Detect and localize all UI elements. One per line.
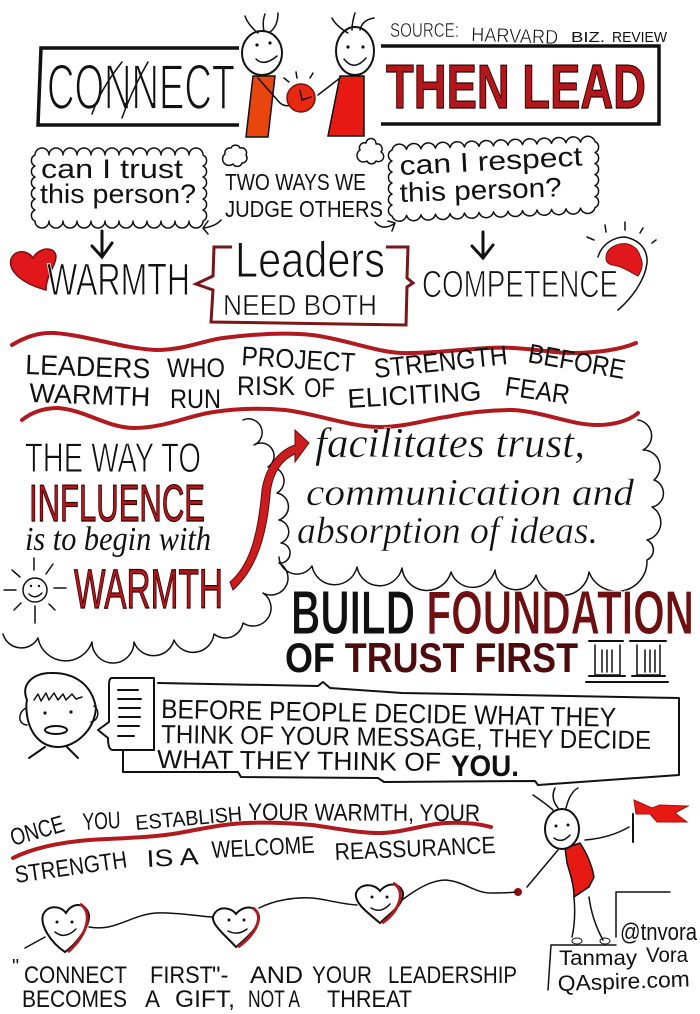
icon: handshake — [284, 72, 315, 112]
banner: leaders who project strength before warmth: WARMTH — [29, 378, 151, 412]
closing quote: YOUR — [312, 962, 372, 989]
cloud panel: the way to influence: is to begin with — [25, 521, 211, 558]
cloud panel: the way to influence: INFLUENCE — [29, 475, 205, 533]
heart two — [213, 908, 259, 947]
source credit: SOURCE: — [390, 20, 459, 42]
credit: tanmay vora — [548, 892, 698, 996]
closing quote: " — [12, 956, 19, 978]
cloud panel: facilitates trust — [279, 420, 663, 596]
arrow: warmth to trust — [230, 430, 309, 590]
cloud panel: facilitates trust: absorption of ideas. — [297, 510, 598, 552]
arrow: respect to competence — [472, 232, 493, 258]
credit: tanmay vora: Tanmay — [559, 947, 638, 970]
text: two ways we judge others: JUDGE OTHERS — [225, 196, 383, 222]
icon: pillars — [586, 641, 668, 682]
banner: leaders who project strength before warmth: BEFORE — [526, 338, 628, 385]
title: connect: CONNECT — [47, 51, 235, 123]
banner: leaders who project strength before warmth: RISK — [237, 371, 295, 401]
icon: red flag — [633, 800, 688, 842]
icon: light bulb brain — [587, 222, 656, 310]
banner: leaders who project strength before warmth: WHO — [167, 353, 225, 383]
thought cloud: can I respect this person — [388, 136, 599, 221]
title: connect — [38, 48, 239, 125]
callout box: before people decide — [123, 682, 679, 785]
callout box: before people decide: WHAT THEY THINK OF — [157, 744, 441, 777]
banner: leaders who project strength before warmth: ELICITING — [347, 376, 482, 414]
statement: once you establish your warmth: ONCE — [7, 811, 68, 852]
credit: tanmay vora: QAspire.com — [557, 966, 690, 996]
label: competence: COMPETENCE — [422, 264, 618, 306]
icon: speaking person — [20, 673, 98, 758]
closing quote: LEADERSHIP — [388, 962, 517, 989]
box: leaders need both: Leaders — [235, 232, 385, 288]
closing quote: A — [145, 986, 160, 1013]
banner: leaders who project strength before warmth: OF — [304, 373, 335, 403]
small clouds and pointers — [203, 138, 395, 234]
thought cloud: can I respect this person: can I respect — [399, 141, 584, 181]
closing quote: CONNECT — [24, 962, 127, 989]
icon: heart — [11, 249, 56, 290]
banner: leaders who project strength before warmth: PROJECT — [241, 341, 356, 378]
banner: leaders who project strength before warmth: RUN — [170, 384, 221, 414]
box: leaders need both — [196, 232, 413, 325]
callout box: before people decide: YOU. — [451, 750, 519, 783]
credit: tanmay vora: Vora — [646, 944, 688, 967]
banner: leaders who project strength before warmth — [12, 333, 638, 428]
heart three — [356, 883, 403, 923]
box: leaders need both: NEED BOTH — [223, 290, 377, 322]
closing quote: NOT A — [248, 986, 300, 1013]
thought cloud: can I trust this person — [31, 148, 207, 228]
figure: left stick person — [242, 13, 296, 137]
text: two ways we judge others — [225, 169, 383, 222]
speech bubble with lines — [98, 678, 154, 750]
callout box: before people decide: THINK OF YOUR MESSAGE, THEY DECIDE — [161, 719, 651, 755]
arrow: trust to warmth — [92, 231, 112, 257]
closing quote: AND — [250, 962, 303, 989]
statement: once you establish your warmth: ESTABLISH — [134, 803, 243, 835]
statement: once you establish your warmth: IS A — [146, 843, 199, 873]
icon: smiling sun — [4, 558, 66, 623]
banner: leaders who project strength before warmth: FEAR — [503, 371, 572, 410]
source credit — [390, 20, 668, 49]
statement: once you establish your warmth: YOU — [82, 807, 121, 836]
banner: leaders who project strength before warmth: STRENGTH — [372, 340, 509, 384]
statement: once you establish your warmth: YOUR WARMTH, YOUR — [248, 799, 480, 827]
figure: person with flag — [514, 788, 629, 944]
text: two ways we judge others: TWO WAYS WE — [225, 169, 366, 195]
label: warmth: WARMTH — [47, 254, 190, 305]
source credit: REVIEW — [612, 29, 668, 46]
closing quote: GIFT, — [175, 986, 235, 1013]
closing quote — [12, 956, 517, 1013]
statement: once you establish your warmth — [7, 799, 496, 889]
heart one — [42, 904, 89, 952]
cloud panel: facilitates trust: communication and — [306, 472, 635, 514]
banner: leaders who project strength before warmth: LEADERS — [25, 349, 151, 384]
closing quote: BECOMES — [22, 986, 127, 1013]
thought cloud: can I trust this person: can I trust — [41, 154, 184, 184]
connecting line with hearts — [25, 880, 515, 952]
cloud panel: the way to influence — [3, 419, 290, 663]
cloud panel: the way to influence: WARMTH — [74, 557, 223, 620]
source credit: BIZ. — [571, 29, 605, 46]
statement: once you establish your warmth: WELCOME — [211, 832, 315, 864]
cloud panel: facilitates trust: facilitates trust, — [315, 421, 585, 467]
heading: build foundation of trust first: OF TRUST FIRST — [285, 634, 578, 681]
cloud panel: the way to influence: THE WAY TO — [25, 434, 201, 481]
thought cloud: can I trust this person: this person? — [40, 179, 196, 209]
source credit: HARVARD — [471, 24, 559, 49]
closing quote: THREAT — [327, 986, 412, 1013]
callout box: before people decide: BEFORE PEOPLE DECIDE WHAT THEY — [161, 694, 616, 733]
thought cloud: can I respect this person: this person? — [399, 172, 562, 208]
closing quote: FIRST — [150, 962, 213, 989]
heading: build foundation of trust first — [285, 579, 694, 681]
statement: once you establish your warmth: STRENGTH — [13, 846, 129, 889]
figure: right stick person — [318, 13, 374, 136]
closing quote: "- — [212, 962, 229, 989]
statement: once you establish your warmth: REASSURANCE — [334, 832, 496, 866]
